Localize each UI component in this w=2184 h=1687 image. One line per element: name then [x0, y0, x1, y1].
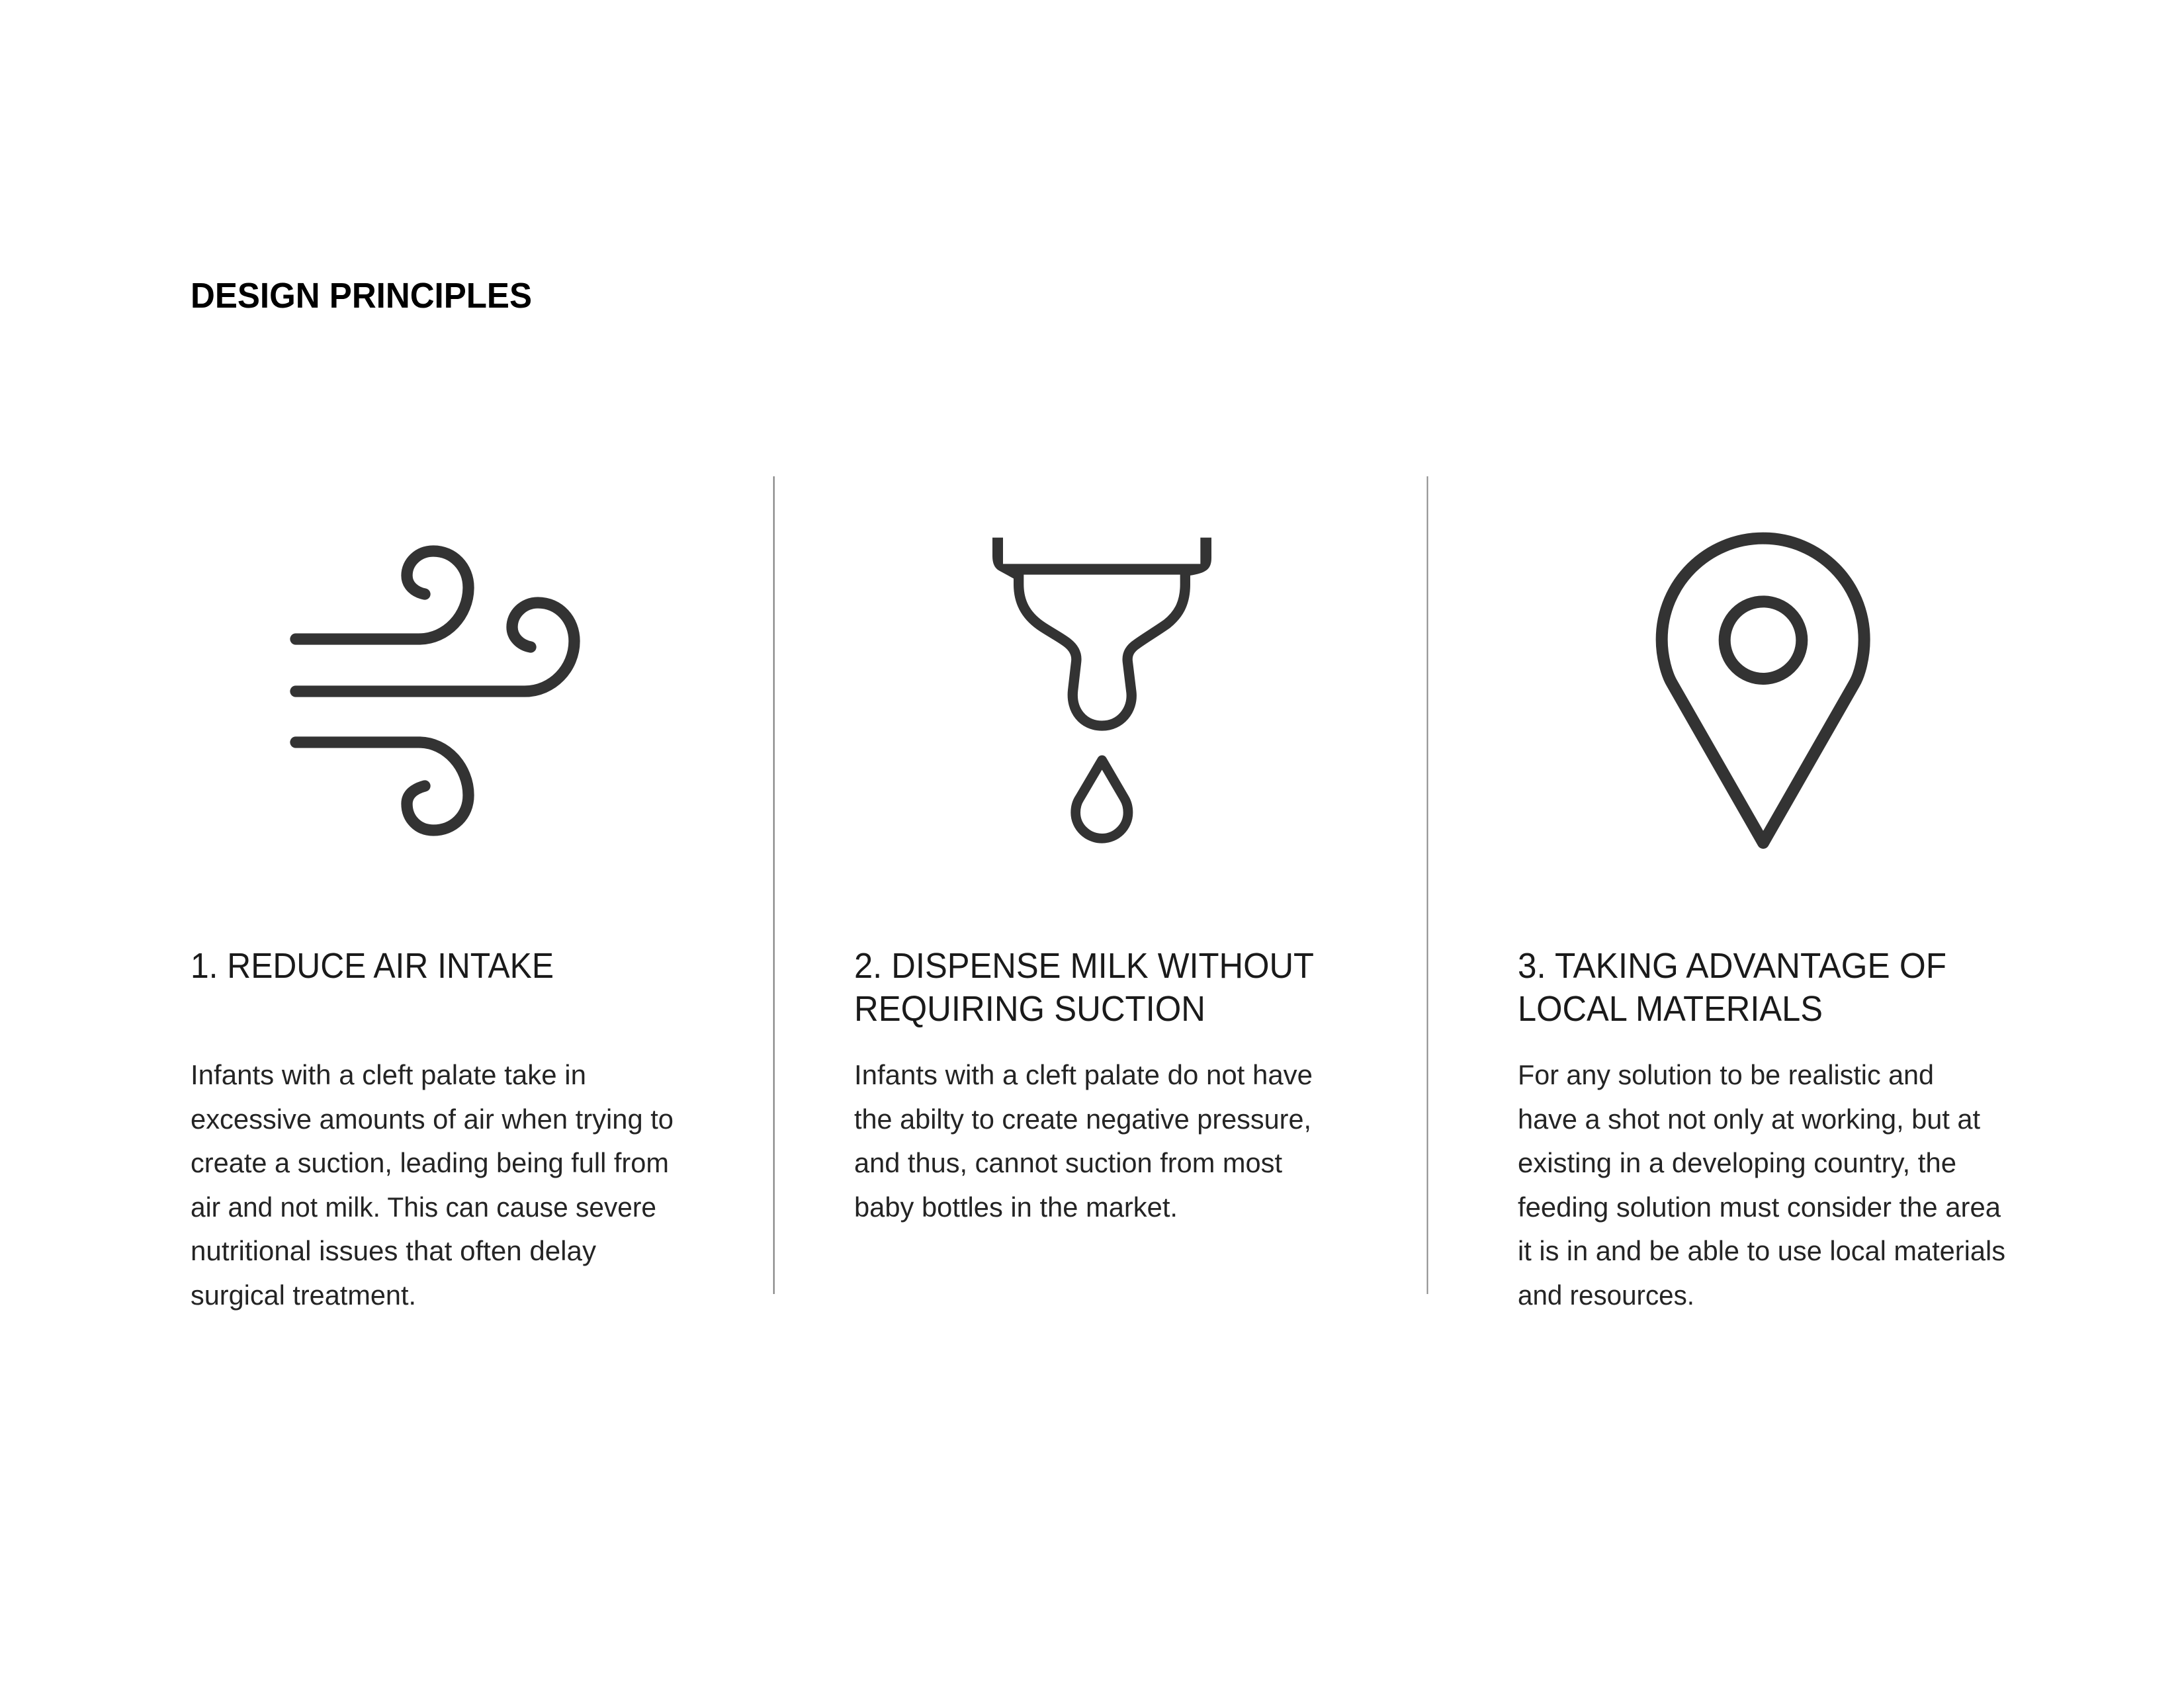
text block: reduce air intake: excessive amounts of air when trying to — [191, 1103, 674, 1135]
panel: dispense milk without requiring suction — [854, 538, 1314, 1223]
heading: dispense milk without requiring suction: REQUIRING SUCTION — [854, 989, 1205, 1029]
text block: local materials: have a shot not only at working, but at — [1518, 1103, 1980, 1135]
heading: dispense milk without requiring suction — [854, 946, 1314, 1029]
text block: local materials: it is in and be able to use local materials — [1518, 1235, 2005, 1266]
text block: local materials — [1518, 1059, 2005, 1311]
text block: local materials: For any solution to be realistic and — [1518, 1059, 1934, 1090]
heading: dispense milk without requiring suction: 2. DISPENSE MILK WITHOUT — [854, 946, 1314, 986]
icon: bottle nipple with milk drop — [992, 538, 1211, 838]
text block: local materials: existing in a developing country, the — [1518, 1147, 1956, 1178]
heading: taking advantage of local materials — [1518, 946, 1946, 1029]
heading: taking advantage of local materials: LOCAL MATERIALS — [1518, 989, 1823, 1029]
heading: taking advantage of local materials: 3. TAKING ADVANTAGE OF — [1518, 946, 1946, 986]
text block: dispense milk: and thus, cannot suction from most — [854, 1147, 1282, 1178]
title: DESIGN PRINCIPLES — [191, 276, 532, 316]
text block: dispense milk: baby bottles in the market. — [854, 1191, 1178, 1223]
text block: dispense milk: the abilty to create negative pressure, — [854, 1103, 1311, 1135]
divider: between columns 2 and 3 — [1426, 476, 1428, 1294]
text block: local materials: and resources. — [1518, 1279, 1694, 1311]
text block: reduce air intake: air and not milk. This can cause severe — [191, 1191, 656, 1223]
panel: taking advantage of local materials — [1518, 539, 2005, 1311]
text block: reduce air intake: surgical treatment. — [191, 1279, 416, 1311]
heading: reduce air intake: 1. REDUCE AIR INTAKE — [191, 946, 554, 986]
panel: reduce air intake — [191, 551, 674, 1311]
divider: between columns 1 and 2 — [773, 476, 775, 1294]
text block: reduce air intake: create a suction, leading being full from — [191, 1147, 669, 1178]
text block: reduce air intake — [191, 1059, 674, 1311]
text block: dispense milk — [854, 1059, 1313, 1223]
text block: reduce air intake: nutritional issues that often delay — [191, 1235, 596, 1266]
icon: map pin — [1662, 539, 1864, 843]
text block: reduce air intake: Infants with a cleft palate take in — [191, 1059, 586, 1090]
icon: wind — [296, 551, 574, 830]
text block: local materials: feeding solution must consider the area — [1518, 1191, 2001, 1223]
text block: dispense milk: Infants with a cleft palate do not have — [854, 1059, 1313, 1090]
